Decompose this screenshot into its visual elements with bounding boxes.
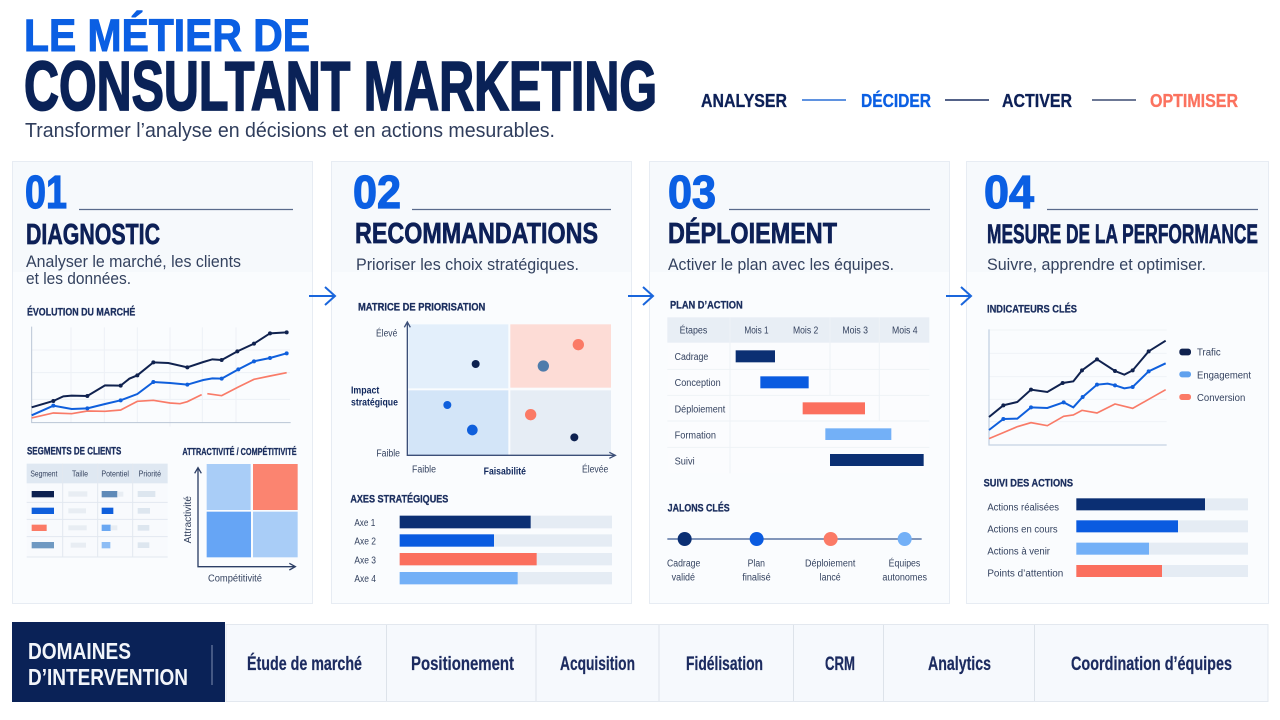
panel 1 charts xyxy=(27,305,298,585)
chart legend: Conversion xyxy=(1197,393,1245,404)
number 04: 04 xyxy=(984,166,1034,218)
milestones timeline: Cadrage xyxy=(667,559,701,570)
panel 2: recommandations xyxy=(332,162,632,604)
description: Suivre, apprendre et optimiser. xyxy=(987,255,1206,274)
strategic axes bars: Axe 2 xyxy=(354,537,376,548)
domains title block: DOMAINES xyxy=(28,638,131,664)
description: Prioriser les choix stratégiques. xyxy=(356,255,579,274)
gantt chart: Conception xyxy=(675,378,721,389)
description: et les données. xyxy=(26,269,131,288)
action tracking heading: SUIVI DES ACTIONS xyxy=(984,478,1073,490)
action tracking bars: Actions à venir xyxy=(987,547,1051,558)
domain: analytics: Analytics xyxy=(928,654,991,675)
milestones timeline: finalisé xyxy=(742,573,771,584)
panel 1: diagnostic xyxy=(12,162,312,604)
line chart: market xyxy=(32,327,291,427)
gantt chart: Étapes xyxy=(680,324,707,337)
domains title block xyxy=(12,622,225,702)
gantt chart: Cadrage xyxy=(675,352,709,363)
gantt chart xyxy=(667,317,929,473)
title line 1: LE MÉTIER DE xyxy=(24,10,310,61)
subtitle: Transformer l’analyse en décisions et en actions mesurables. xyxy=(25,120,555,142)
number 01: 01 xyxy=(25,166,67,218)
action tracking bars: Points d’attention xyxy=(987,569,1063,580)
heading: RECOMMANDATIONS xyxy=(355,218,598,250)
domain: coordination d'équipes: Coordination d’équipes xyxy=(1071,654,1232,675)
step: activer: ACTIVER xyxy=(1002,91,1072,111)
domains bar xyxy=(12,622,1268,702)
panel 2 charts xyxy=(350,302,615,585)
matrix heading: ATTRACTIVITÉ / COMPÉTITIVITÉ xyxy=(182,445,297,458)
arrow 3 xyxy=(946,287,971,305)
segments table: Potentiel xyxy=(101,469,129,479)
step: décider: DÉCIDER xyxy=(861,90,931,111)
segments table: Segment xyxy=(30,469,58,479)
number 03: 03 xyxy=(668,166,716,218)
axes heading: AXES STRATÉGIQUES xyxy=(350,493,448,506)
strategic axes bars: Axe 4 xyxy=(354,574,376,585)
domain: acquisition: Acquisition xyxy=(560,654,635,675)
step: optimiser: OPTIMISER xyxy=(1150,91,1238,111)
gantt chart: Mois 2 xyxy=(793,326,819,337)
header xyxy=(24,10,657,142)
arrow 1 xyxy=(309,287,335,305)
priority matrix: Faisabilité xyxy=(484,466,526,477)
gantt chart: Déploiement xyxy=(675,404,726,415)
domain: positionement: Positionement xyxy=(411,654,515,675)
priority matrix: Faible xyxy=(412,465,436,476)
line chart: kpis xyxy=(989,329,1167,445)
gantt chart: Mois 4 xyxy=(892,326,918,337)
priority matrix xyxy=(351,322,615,477)
strategic axes bars: Axe 3 xyxy=(354,555,376,566)
segments table xyxy=(27,464,168,557)
panel 4 charts xyxy=(984,302,1251,580)
segments heading: SEGMENTS DE CLIENTS xyxy=(27,446,121,458)
milestones timeline: Plan xyxy=(748,559,765,570)
strategic axes bars: Axe 1 xyxy=(354,518,376,529)
chart heading: PLAN D’ACTION xyxy=(670,300,743,312)
domain: étude de marché: Étude de marché xyxy=(247,653,362,675)
panel 3 charts xyxy=(667,300,929,584)
chart legend: Trafic xyxy=(1197,348,1221,359)
domains title block: D’INTERVENTION xyxy=(28,664,188,690)
milestones timeline xyxy=(667,532,927,584)
chart heading: INDICATEURS CLÉS xyxy=(987,302,1077,315)
chart legend xyxy=(1179,348,1251,404)
action tracking bars: Actions en cours xyxy=(987,525,1058,536)
milestones timeline: autonomes xyxy=(882,573,927,584)
step: analyser: ANALYSER xyxy=(701,91,787,111)
milestones timeline: Déploiement xyxy=(805,559,856,570)
chart heading: MATRICE DE PRIORISATION xyxy=(358,302,485,314)
domain: fidélisation: Fidélisation xyxy=(686,654,763,675)
milestones timeline: Équipes xyxy=(889,557,920,570)
milestones timeline: validé xyxy=(672,573,695,584)
description: Analyser le marché, les clients xyxy=(26,252,241,271)
chart legend: Engagement xyxy=(1197,370,1251,381)
arrow 2 xyxy=(628,287,653,305)
heading: DIAGNOSTIC xyxy=(26,219,160,251)
gantt chart: Mois 1 xyxy=(744,326,769,337)
action tracking bars xyxy=(987,498,1248,580)
heading: DÉPLOIEMENT xyxy=(668,216,837,250)
attractivity matrix xyxy=(183,464,298,585)
panel 4: mesure de la performance xyxy=(966,162,1268,604)
priority matrix: Élevé xyxy=(376,327,398,340)
priority matrix: stratégique xyxy=(351,398,398,409)
priority matrix: Impact xyxy=(351,385,380,396)
chart heading: ÉVOLUTION DU MARCHÉ xyxy=(27,305,135,318)
action tracking bars: Actions réalisées xyxy=(987,502,1059,513)
process steps xyxy=(701,90,1238,111)
strategic axes bars xyxy=(354,516,612,585)
attractivity matrix: Compétitivité xyxy=(208,574,262,585)
segments table: Taille xyxy=(72,469,88,479)
number 02: 02 xyxy=(353,166,401,218)
priority matrix: Faible xyxy=(376,449,400,460)
description: Activer le plan avec les équipes. xyxy=(668,255,894,274)
gantt chart: Formation xyxy=(675,430,716,441)
gantt chart: Mois 3 xyxy=(842,326,868,337)
segments table: Priorité xyxy=(139,469,161,479)
gantt chart: Suivi xyxy=(675,456,695,467)
panel 3: déploiement xyxy=(650,162,950,604)
attractivity matrix: Attractivité xyxy=(183,496,194,543)
priority matrix: Élevée xyxy=(582,463,609,476)
title line 2: CONSULTANT MARKETING xyxy=(24,47,657,125)
domain: crm: CRM xyxy=(825,654,855,675)
milestones timeline: lancé xyxy=(820,573,841,584)
milestones heading: JALONS CLÉS xyxy=(668,502,730,515)
